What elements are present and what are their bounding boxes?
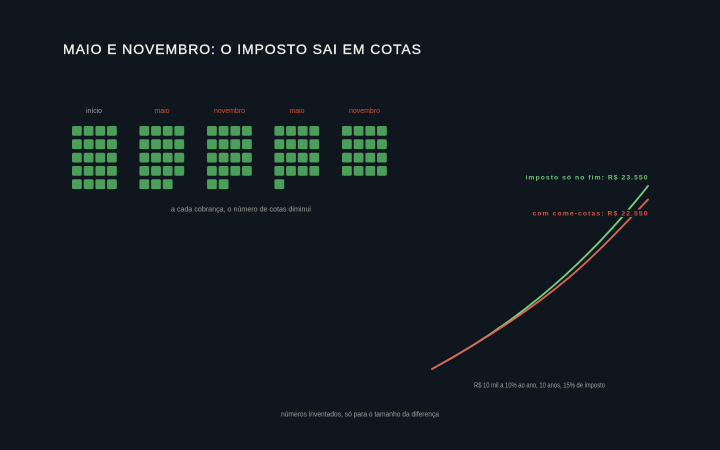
label: novembro: novembro: [214, 108, 245, 115]
line: com come-cotas: [432, 200, 648, 369]
label: maio: maio: [154, 108, 170, 115]
title: MAIO E NOVEMBRO: O IMPOSTO SAI EM COTAS: [63, 41, 421, 57]
caption: cotas: a cada cobrança, o número de cotas diminui: [171, 206, 311, 214]
footnote: números inventados, só para o tamanho da diferença: [281, 412, 439, 418]
cotas: novembro, 18: [207, 126, 252, 189]
label: imposto só no fim: imposto só no fim: R$ 23.550: [526, 174, 648, 182]
panel: cotas: [72, 108, 387, 214]
label: início: início: [86, 108, 102, 115]
caption: premissas: R$ 10 mil a 10% ao ano, 10 anos, 15% de imposto: [474, 382, 605, 390]
label: com come-cotas: com come-cotas: R$ 22.550: [532, 210, 648, 218]
cotas: início, 20: [72, 126, 117, 189]
cotas: maio, 17: [274, 126, 319, 189]
cotas: maio, 19: [139, 126, 184, 189]
label: maio: maio: [290, 108, 305, 115]
label: novembro: novembro: [349, 108, 380, 115]
line chart: imposto só no fim vs come-cotas: [432, 174, 648, 390]
line: imposto só no fim: [432, 186, 648, 369]
cotas: novembro, 16: [342, 126, 387, 176]
